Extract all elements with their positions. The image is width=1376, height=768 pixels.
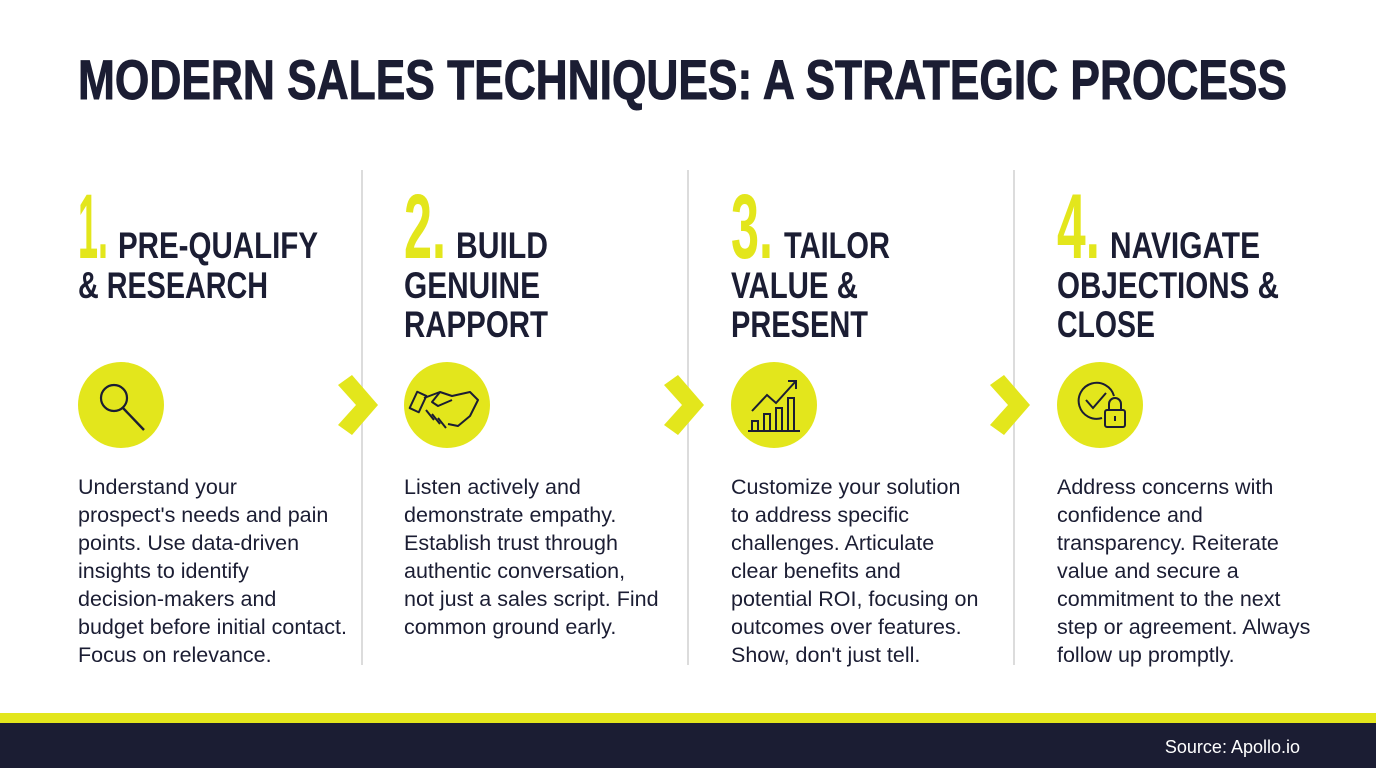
number 3: 3. xyxy=(731,176,773,278)
number 4: 4. xyxy=(1057,176,1100,278)
body 2: Listen actively and xyxy=(404,475,581,499)
body 2 xyxy=(404,475,659,639)
heading 1: & RESEARCH xyxy=(78,265,268,306)
arrow 1 xyxy=(338,375,378,435)
heading 1 xyxy=(78,225,318,306)
body 4: value and secure a xyxy=(1057,559,1239,583)
source text: Source: Apollo.io xyxy=(1165,737,1300,757)
heading 1: PRE-QUALIFY xyxy=(118,225,318,266)
body 1: prospect's needs and pain xyxy=(78,503,328,527)
panel: step 2 xyxy=(404,176,659,639)
panel: step 4 xyxy=(1057,176,1310,667)
body 3: clear benefits and xyxy=(731,559,901,583)
body 3: Customize your solution xyxy=(731,475,960,499)
body 3: to address specific xyxy=(731,503,909,527)
body 1: decision-makers and xyxy=(78,587,276,611)
heading 4: CLOSE xyxy=(1057,304,1155,345)
body 2: common ground early. xyxy=(404,615,616,639)
arrow 2 xyxy=(664,375,704,435)
panel: step 1: 1. xyxy=(78,176,108,278)
icon: growth chart xyxy=(731,362,817,448)
icon: handshake xyxy=(404,362,490,448)
body 4: Address concerns with xyxy=(1057,475,1273,499)
panel: step 3 xyxy=(731,176,978,667)
body 3: challenges. Articulate xyxy=(731,531,934,555)
heading 4: NAVIGATE xyxy=(1110,225,1260,266)
body 3 xyxy=(731,475,978,667)
heading 2 xyxy=(404,225,548,345)
heading 2: GENUINE xyxy=(404,265,540,306)
footer xyxy=(0,713,1376,768)
body 1: points. Use data-driven xyxy=(78,531,299,555)
body 2: authentic conversation, xyxy=(404,559,625,583)
heading 3: PRESENT xyxy=(731,304,868,345)
body 4: confidence and xyxy=(1057,503,1203,527)
body 2: Establish trust through xyxy=(404,531,618,555)
body 1: Focus on relevance. xyxy=(78,643,272,667)
heading 3: TAILOR xyxy=(784,225,890,266)
heading 4 xyxy=(1057,225,1279,345)
icon: check with lock xyxy=(1057,362,1143,448)
body 4: follow up promptly. xyxy=(1057,643,1235,667)
heading 3: VALUE & xyxy=(731,265,858,306)
body 2: demonstrate empathy. xyxy=(404,503,616,527)
body 1: insights to identify xyxy=(78,559,249,583)
body 1: budget before initial contact. xyxy=(78,615,347,639)
arrow 3 xyxy=(990,375,1030,435)
body 2: not just a sales script. Find xyxy=(404,587,659,611)
body 3: potential ROI, focusing on xyxy=(731,587,978,611)
heading 4: OBJECTIONS & xyxy=(1057,265,1279,306)
heading 2: BUILD xyxy=(456,225,548,266)
body 4: transparency. Reiterate xyxy=(1057,531,1279,555)
heading 3 xyxy=(731,225,890,345)
body 3: Show, don't just tell. xyxy=(731,643,920,667)
body 4: step or agreement. Always xyxy=(1057,615,1310,639)
icon: magnifier xyxy=(78,362,164,448)
body 4 xyxy=(1057,475,1310,667)
body 1: Understand your xyxy=(78,475,237,499)
panel: step 1 xyxy=(78,176,347,667)
body 1 xyxy=(78,475,347,667)
number 2: 2. xyxy=(404,176,446,278)
body 4: commitment to the next xyxy=(1057,587,1280,611)
body 3: outcomes over features. xyxy=(731,615,962,639)
heading 2: RAPPORT xyxy=(404,304,548,345)
